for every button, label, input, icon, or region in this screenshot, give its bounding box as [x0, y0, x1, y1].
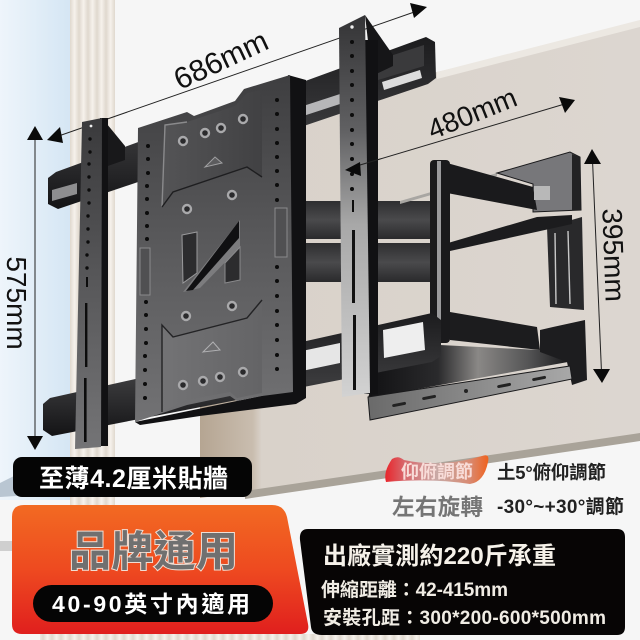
arrow: 575mm height [27, 126, 43, 450]
pivot column [430, 160, 450, 343]
rail: bottom horizontal [43, 313, 441, 436]
swing arms: horizontal pair [300, 201, 440, 282]
dimension label: 395mm: 395mm [596, 208, 631, 302]
upper shelf [400, 173, 497, 204]
badge: tilt adjust: 仰俯調節 [401, 461, 473, 482]
upper arm [447, 163, 537, 210]
washers [179, 115, 247, 389]
arrow: 395mm height [584, 149, 610, 383]
holes: left column [143, 144, 150, 400]
pill: screen size: 40-90英寸內適用 [52, 591, 250, 617]
bar: right vertical [339, 15, 393, 397]
bar: left vertical [75, 118, 125, 449]
triangles [205, 157, 222, 167]
panel: specifications [300, 529, 625, 635]
lower arm [450, 312, 540, 350]
side tabs [275, 208, 287, 257]
back vertical plate [547, 217, 584, 310]
rail: top horizontal [48, 37, 436, 209]
callout: 4.2cm slim [13, 457, 252, 497]
dimension label: 575mm: 575mm [1, 256, 32, 350]
top recess [162, 90, 262, 207]
centre logo mark [182, 220, 240, 292]
heading: brand universal: 品牌通用 [69, 528, 238, 575]
holes: right column [275, 98, 279, 371]
spec: load: 出廠實測約220斤承重 [323, 542, 556, 570]
mounting plate: centre [135, 75, 306, 425]
text: swivel value: -30°~+30°調節 [497, 495, 624, 518]
panel: brand compatibility [12, 505, 308, 634]
lower dark shade [368, 345, 568, 398]
lower right plate [540, 320, 587, 385]
top wall plate [497, 152, 581, 212]
badge: tilt adjust [385, 455, 488, 484]
wall mount bracket [368, 152, 587, 420]
dimension label: 480mm: 480mm [423, 82, 521, 145]
dimension label: 686mm: 686mm [169, 24, 274, 97]
pill: screen size [33, 585, 273, 622]
lower silver strip [368, 366, 572, 420]
spec: extension: 伸縮距離：42-415mm [321, 578, 508, 601]
bottom recess [162, 300, 262, 412]
text: tilt value: 土5°俯仰調節 [497, 462, 606, 483]
arrow: 480mm depth [345, 97, 575, 176]
middle arm [448, 215, 572, 251]
background: beige wall [200, 20, 640, 499]
text: swivel heading: 左右旋轉 [392, 495, 483, 520]
callout: 4.2cm slim: 至薄4.2厘米貼牆 [39, 465, 228, 493]
spec: hole spacing: 安裝孔距：300*200-600*500mm [323, 606, 606, 629]
arrow: 686mm width [47, 3, 427, 143]
